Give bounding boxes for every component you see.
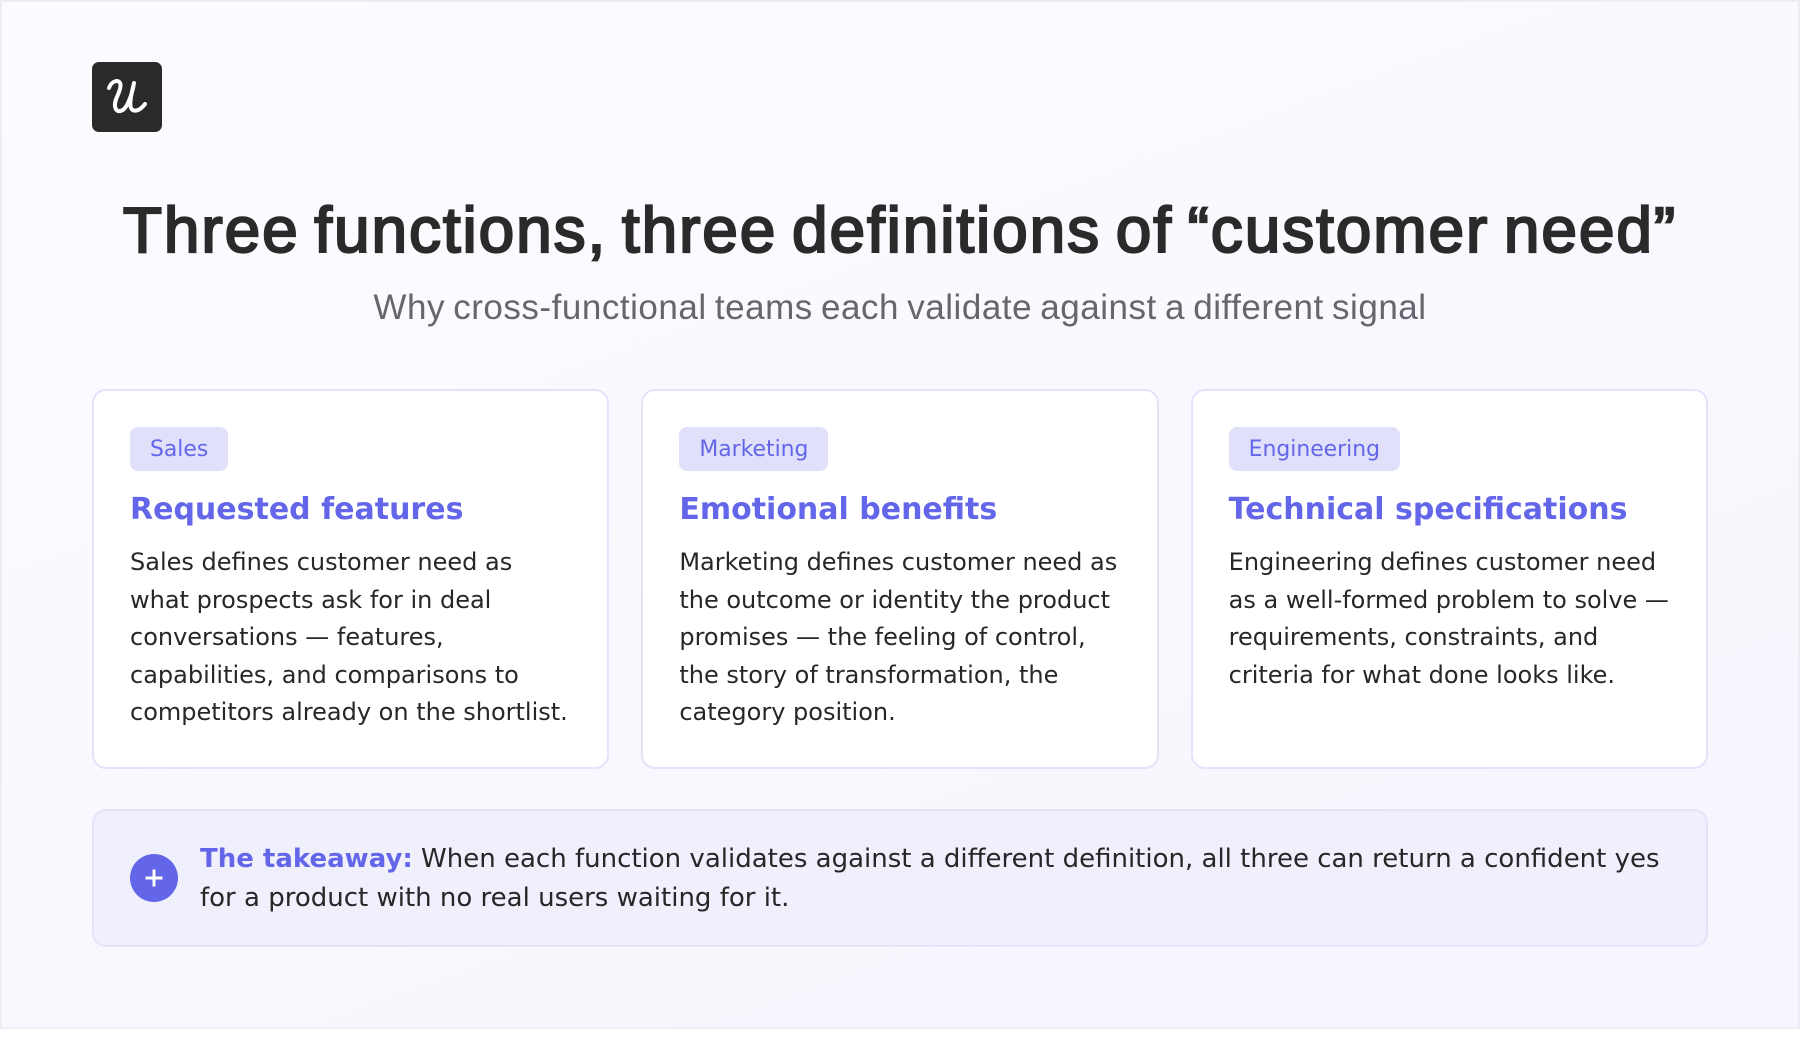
badge: engineering [1229, 427, 1400, 470]
text: marketing definition: Marketing defines customer need as [679, 548, 1117, 576]
icon: plus [130, 854, 178, 902]
text: takeaway [200, 844, 1660, 913]
subtitle: Why cross-functional teams each validate against a different signal [373, 288, 1427, 327]
text: marketing definition [679, 548, 1117, 726]
badge: marketing [679, 427, 828, 470]
panel: marketing [641, 389, 1159, 769]
callout: takeaway [92, 809, 1708, 947]
text: engineering definition: as a well-formed problem to solve — [1229, 586, 1669, 614]
panel: sales [92, 389, 609, 769]
panel: engineering [1191, 389, 1708, 769]
text: sales definition: capabilities, and comparisons to [130, 661, 519, 689]
badge: sales [130, 427, 228, 470]
text: marketing definition: category position. [679, 698, 896, 726]
text: sales definition: Sales defines customer need as [130, 548, 512, 576]
title: Three functions, three definitions of “customer need” [123, 194, 1677, 266]
text: sales definition: competitors already on the shortlist. [130, 698, 568, 726]
badge: sales: Sales [150, 437, 208, 462]
badge: marketing: Marketing [699, 437, 808, 462]
text: sales definition [130, 548, 568, 726]
text: engineering definition: Engineering defines customer need [1229, 548, 1656, 576]
text: sales definition: what prospects ask for in deal [130, 586, 491, 614]
badge: engineering: Engineering [1249, 437, 1380, 462]
text: takeaway: for a product with no real users waiting for it. [200, 883, 789, 913]
text: marketing definition: promises — the feeling of control, [679, 623, 1086, 651]
icon: logo [92, 62, 162, 132]
heading: technical specifications: Technical specifications [1229, 492, 1627, 527]
heading: requested features: Requested features [130, 492, 463, 527]
text: takeaway: The takeaway: When each function validates against a different definition, all three can return a confident yes [200, 844, 1660, 874]
heading: emotional benefits: Emotional benefits [679, 492, 997, 527]
text: engineering definition [1229, 548, 1669, 689]
text: engineering definition: criteria for what done looks like. [1229, 661, 1615, 689]
text: marketing definition: the outcome or identity the product [679, 586, 1110, 614]
text: engineering definition: requirements, constraints, and [1229, 623, 1598, 651]
text: marketing definition: the story of transformation, the [679, 661, 1058, 689]
text: sales definition: conversations — features, [130, 623, 444, 651]
